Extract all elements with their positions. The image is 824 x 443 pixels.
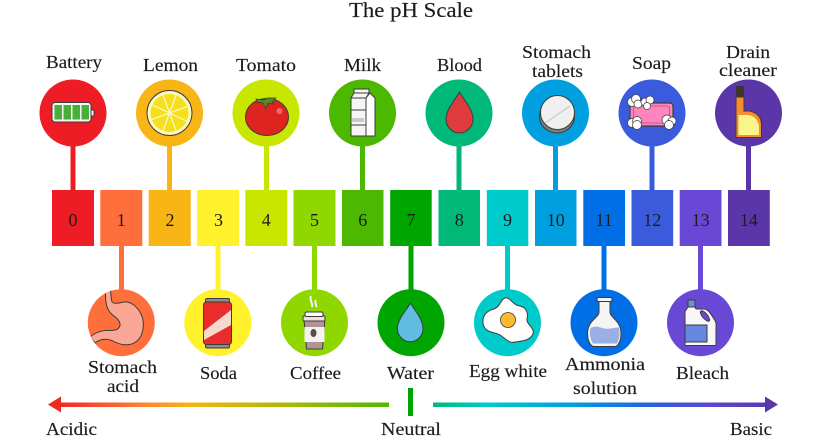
label: Egg white: Egg white bbox=[469, 361, 547, 381]
pH 9 column: egg white bbox=[469, 246, 547, 381]
square 3: 3 bbox=[214, 210, 223, 230]
label: Water: Water bbox=[387, 363, 434, 383]
icon: water drop bbox=[397, 303, 423, 342]
pH scale squares bbox=[52, 190, 770, 246]
label: Drain cleaner bbox=[719, 42, 777, 80]
icon: tablet bbox=[540, 96, 574, 133]
square 2: 2 bbox=[166, 210, 174, 230]
label: Bleach: Bleach bbox=[676, 363, 729, 383]
square 11: 11 bbox=[595, 210, 613, 230]
label: Battery: Battery bbox=[46, 52, 102, 72]
square 0: 0 bbox=[68, 210, 78, 230]
pH 8 column: blood bbox=[426, 55, 492, 192]
square 12: 12 bbox=[643, 210, 661, 230]
square 3 bbox=[197, 190, 239, 246]
square 5: 5 bbox=[310, 210, 319, 230]
label: Stomach acid bbox=[88, 357, 157, 396]
square 1: 1 bbox=[117, 210, 126, 230]
pH 0 column: battery bbox=[40, 52, 106, 192]
square 0 bbox=[52, 190, 94, 246]
icon: soda can bbox=[204, 298, 232, 348]
label: Ammonia solution bbox=[565, 354, 645, 398]
label: Stomach tablets bbox=[522, 42, 591, 81]
pH 2 column: lemon bbox=[136, 55, 203, 192]
label: Drain cleaner: cleaner bbox=[719, 60, 777, 80]
pH 10 column: stomach tablets bbox=[522, 42, 591, 192]
icon: stomach bbox=[90, 288, 143, 345]
icon: flask bbox=[588, 298, 621, 346]
square 6: 6 bbox=[358, 210, 367, 230]
icon: lemon slice bbox=[147, 90, 192, 136]
pH 13 column: bleach bbox=[667, 246, 734, 383]
icon: tomato bbox=[246, 98, 288, 136]
square 5 bbox=[294, 190, 336, 246]
square 12 bbox=[632, 190, 673, 246]
pH 12 column: soap bbox=[618, 53, 686, 192]
square 4: 4 bbox=[262, 210, 271, 230]
pH 14 column: drain cleaner bbox=[715, 42, 782, 192]
label: Basic: Basic bbox=[730, 419, 772, 439]
label: Blood: Blood bbox=[437, 55, 482, 75]
pH 1 column: stomach acid bbox=[88, 246, 157, 396]
label: Stomach tablets: Stomach bbox=[522, 42, 591, 62]
icon: coffee cup bbox=[303, 296, 325, 349]
label: Lemon: Lemon bbox=[143, 55, 198, 75]
square 7: 7 bbox=[406, 210, 416, 230]
icon: soap bar bbox=[628, 94, 676, 130]
neutral marker bbox=[408, 388, 413, 416]
square 8: 8 bbox=[455, 210, 464, 230]
icon: bleach bottle bbox=[685, 300, 716, 346]
square 13: 13 bbox=[692, 210, 710, 230]
pH 11 column: ammonia solution bbox=[565, 246, 645, 398]
label: Tomato: Tomato bbox=[236, 55, 296, 75]
label: Ammonia solution: Ammonia bbox=[565, 354, 645, 374]
label: Milk: Milk bbox=[344, 55, 381, 75]
arrow: basic bbox=[433, 396, 778, 412]
square 1 bbox=[100, 190, 142, 246]
arrow: acidic bbox=[48, 396, 389, 412]
square 13 bbox=[680, 190, 722, 246]
icon: blood drop bbox=[446, 92, 473, 133]
square 4 bbox=[245, 190, 287, 246]
pH 6 column: milk bbox=[329, 55, 396, 192]
label: Ammonia solution: solution bbox=[573, 378, 637, 398]
label: Stomach acid: Stomach bbox=[88, 357, 157, 377]
square 9: 9 bbox=[503, 210, 512, 230]
pH 4 column: tomato bbox=[232, 55, 300, 192]
label: Coffee: Coffee bbox=[290, 363, 341, 383]
pH 5 column: coffee bbox=[281, 246, 348, 383]
square 2 bbox=[149, 190, 191, 246]
label: Soap: Soap bbox=[632, 53, 671, 73]
label: Soda: Soda bbox=[200, 363, 237, 383]
label: Acidic: Acidic bbox=[46, 419, 97, 439]
square 14: 14 bbox=[740, 210, 758, 230]
icon: fried egg bbox=[483, 298, 533, 342]
label: Stomach acid: acid bbox=[107, 376, 139, 396]
icon: battery bbox=[52, 102, 94, 122]
square 11 bbox=[583, 190, 625, 246]
square 6 bbox=[342, 190, 384, 246]
icon: drain cleaner bottle bbox=[736, 86, 762, 138]
pH 3 column: soda bbox=[184, 246, 251, 383]
icon: milk carton bbox=[351, 89, 375, 136]
label: Neutral: Neutral bbox=[381, 419, 441, 439]
square 10 bbox=[535, 190, 576, 246]
pH 7 column: water bbox=[378, 246, 444, 383]
label: Drain cleaner: Drain bbox=[726, 42, 770, 62]
square 7 bbox=[390, 190, 432, 246]
square 10: 10 bbox=[547, 210, 565, 230]
square 9 bbox=[487, 190, 528, 246]
label: Stomach tablets: tablets bbox=[532, 61, 583, 81]
square 8 bbox=[438, 190, 480, 246]
square 14 bbox=[728, 190, 770, 246]
